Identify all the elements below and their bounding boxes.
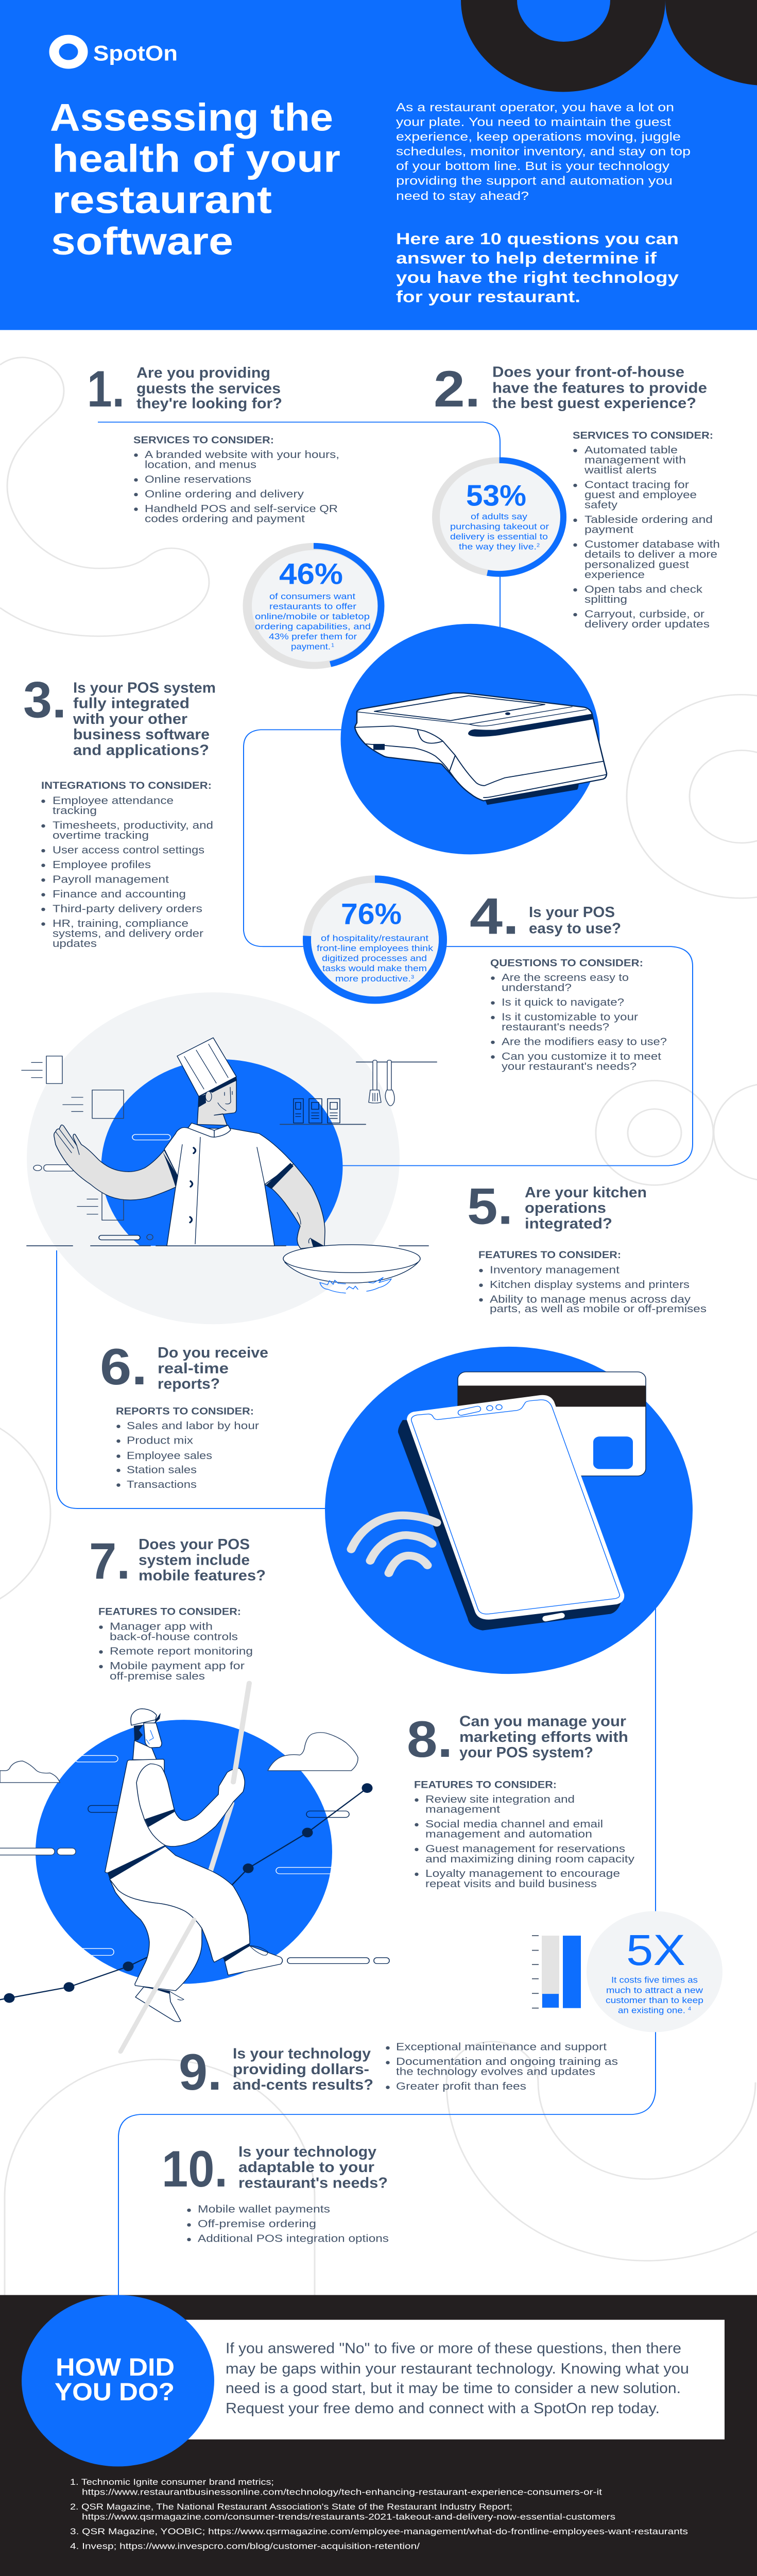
intro paragraph: need to stay ahead? (396, 190, 529, 203)
list: integrations to consider (41, 780, 213, 950)
list: services to consider: Online reservations (145, 473, 251, 485)
list: features to consider: Remote report monitoring (110, 1646, 253, 1657)
title: Assessing the (50, 96, 333, 139)
list: questions to consider: understand? (502, 982, 572, 993)
footnotes: https://www.restaurantbusinessonline.com/technology/tech-enhancing-restaurant-experience-consumers-or-it (82, 2487, 602, 2497)
heading 6: real-time (158, 1361, 229, 1377)
number 9: 9. (179, 2044, 222, 2101)
list: reports to consider: Employee sales (127, 1450, 212, 1462)
list: reports to consider: Sales and labor by hour (127, 1420, 259, 1432)
conclusion box: Request your free demo and connect with a SpotOn rep today. (226, 2401, 660, 2417)
intro callout: Here are 10 questions you can (396, 230, 679, 248)
list: services to consider: SERVICES TO CONSIDER: (133, 434, 274, 446)
list: services to consider: Tableside ordering and (584, 514, 713, 526)
conclusion box: need is a good start, but it may be time to consider a new solution. (226, 2381, 681, 2397)
list: features to consider: Inventory management (490, 1264, 620, 1276)
heading 4 (529, 905, 621, 937)
heading 6 (158, 1345, 268, 1392)
heading 7: system include (139, 1552, 250, 1568)
stat 46%: restaurants to offer (269, 601, 356, 611)
stat 46%: payment. (291, 642, 331, 651)
stat 76% (303, 875, 447, 1004)
clouds and pills (0, 1733, 389, 1963)
list: services to consider: personalized guest (584, 558, 689, 570)
heading 9: providing dollars- (233, 2061, 369, 2077)
stat 46%: of consumers want (269, 591, 355, 601)
heading 10: Is your technology (238, 2144, 376, 2160)
question 3 (23, 671, 216, 950)
heading 10: adaptable to your (238, 2160, 374, 2176)
list: reports to consider: REPORTS TO CONSIDER: (116, 1406, 254, 1417)
heading 8: Can you manage your (459, 1714, 626, 1730)
list: features to consider (478, 1249, 707, 1315)
intro callout: you have the right technology (396, 269, 679, 286)
illustration: chef (22, 1038, 437, 1293)
stat 53% (432, 457, 566, 577)
footnotes: 4. Invesp; https://www.invespcro.com/blog/customer-acquisition-retention/ (70, 2541, 420, 2551)
heading 3 (73, 680, 216, 758)
list: features to consider: Guest management for reservations (425, 1843, 625, 1855)
list: features to consider: back-of-house controls (110, 1631, 238, 1642)
list: features to consider: repeat visits and build business (425, 1878, 597, 1890)
list: integrations to consider: tracking (53, 805, 97, 817)
list: features to consider: parts, as well as mobile or off-premises (490, 1303, 707, 1315)
heading 7: mobile features? (139, 1568, 266, 1584)
list: questions to consider: your restaurant's needs? (502, 1061, 636, 1072)
list: services to consider: details to deliver a more (584, 549, 717, 560)
heading 9: and-cents results? (233, 2077, 373, 2093)
list: results: Greater profit than fees (396, 2080, 526, 2092)
number 8: 8. (407, 1711, 453, 1768)
list: integrations to consider: overtime tracking (53, 829, 149, 841)
heading 8 (459, 1714, 628, 1761)
list: features to consider: Social media channel and email (425, 1818, 603, 1830)
number 6: 6. (100, 1338, 147, 1395)
stat 76%: tasks would make them (322, 963, 427, 973)
number 1: 1. (87, 361, 125, 418)
stat 53%: the way they live. (459, 542, 537, 551)
stat 5X (587, 1911, 722, 2032)
heading 10: restaurant's needs? (238, 2175, 388, 2191)
number 7: 7. (89, 1533, 130, 1590)
mixing bowl (285, 1262, 418, 1283)
heading 1: Are you providing (136, 365, 270, 381)
stat 76%: of hospitality/restaurant (321, 933, 428, 943)
intro paragraph: schedules, monitor inventory, and stay on top (396, 145, 691, 158)
conclusion box (154, 2320, 725, 2439)
stat 53%: 2 (537, 543, 540, 548)
list: features to consider: off-premise sales (110, 1670, 205, 1682)
list: integrations to consider: Payroll management (53, 874, 169, 885)
list: services to consider: Contact tracing for (584, 479, 689, 490)
heading 2: have the features to provide (492, 380, 707, 396)
list: features to consider: Manager app with (110, 1621, 213, 1632)
list: services to consider: codes ordering and payment (145, 513, 305, 524)
intro paragraph: experience, keep operations moving, juggle (396, 130, 681, 144)
list: services to consider (573, 430, 720, 630)
heading 9 (233, 2046, 373, 2093)
pole in hand (233, 1683, 249, 1782)
how did you do badge (22, 2295, 214, 2466)
heading 4: easy to use? (529, 921, 621, 937)
illustration: climber on growth chart (0, 1683, 389, 2052)
heading 2 (492, 364, 707, 411)
stat 53%: of adults say (471, 512, 527, 521)
list: integrations to consider: Timesheets, productivity, and (53, 820, 213, 831)
wifi signal (351, 1515, 437, 1573)
bar chart: acquisition vs retention cost (532, 1935, 581, 2009)
intro paragraph: providing the support and automation you (396, 175, 673, 188)
footer panel (0, 2295, 757, 2576)
list: features to consider: Mobile payment app for (110, 1660, 245, 1672)
heading 4: Is your POS (529, 905, 615, 921)
list: features to consider: Ability to manage menus across day (490, 1294, 691, 1305)
chef left arm (54, 1125, 178, 1200)
stat 5X: 5X (626, 1926, 685, 1975)
stat 5X: customer than to keep (606, 1995, 703, 2005)
question 10 (162, 2140, 389, 2244)
how did you do badge: HOW DID (56, 2353, 175, 2381)
pole lower (121, 1920, 194, 2052)
heading 10 (238, 2144, 388, 2191)
footnotes: 2. QSR Magazine, The National Restaurant Association's State of the Restaurant Industry Report; (70, 2502, 512, 2512)
heading 3: and applications? (73, 742, 209, 758)
chef blue circle (101, 1059, 343, 1246)
stat 76%: digitized processes and (322, 954, 427, 963)
footnotes (70, 2477, 688, 2551)
list: reports to consider: Product mix (127, 1435, 193, 1446)
heading 3: business software (73, 727, 210, 743)
list: integrations to consider: systems, and delivery order (53, 928, 203, 939)
list: integrations to consider: Employee attendance (53, 795, 174, 806)
heading 9: Is your technology (233, 2046, 371, 2062)
list: questions to consider: Can you customize it to meet (502, 1050, 661, 1062)
list: results: the technology evolves and updates (396, 2066, 595, 2077)
payment card (458, 1372, 646, 1476)
footnotes: 3. QSR Magazine, YOOBIC; https://www.qsrmagazine.com/employee-management/what-do-frontline-employees-want-restaurants (70, 2527, 688, 2536)
heading 6: reports? (158, 1376, 220, 1392)
list: questions to consider (490, 958, 667, 1072)
list: features to consider: FEATURES TO CONSIDER: (414, 1780, 557, 1790)
stat 5X: much to attract a new (606, 1985, 703, 1995)
heading 8: your POS system? (459, 1745, 593, 1761)
decorative black loops (461, 0, 757, 92)
number 2: 2. (434, 361, 480, 418)
stat 53%: 53% (466, 479, 526, 512)
list: features to consider (414, 1780, 634, 1890)
decorative background outlines (0, 358, 757, 2295)
list: features to consider: Review site integration and (425, 1793, 575, 1805)
conclusion box: may be gaps within your restaurant technology. Knowing what you (226, 2361, 689, 2377)
heading 2: Does your front-of-house (492, 364, 684, 380)
list: features to consider: management (425, 1804, 500, 1815)
list: integrations to consider: INTEGRATIONS TO CONSIDER: (41, 780, 212, 791)
heading 7: Does your POS (139, 1537, 250, 1553)
question 1 (87, 361, 339, 524)
how did you do badge: YOU DO? (55, 2378, 175, 2406)
list: questions to consider: Is it quick to navigate? (502, 996, 624, 1008)
list: services to consider: Open tabs and check (584, 583, 702, 595)
footnotes: 1. Technomic Ignite consumer brand metrics; (70, 2477, 274, 2487)
heading 5: operations (525, 1200, 606, 1216)
heading 5 (525, 1184, 647, 1232)
growth chart line (0, 1783, 373, 2003)
chef coat (164, 1128, 294, 1246)
stat 53%: delivery is essential to (450, 532, 548, 541)
list: questions to consider: Are the modifiers easy to use? (502, 1036, 667, 1047)
list: services to consider: Handheld POS and self-service QR (145, 503, 338, 514)
number 5: 5. (467, 1178, 513, 1235)
list: services to consider: guest and employee (584, 489, 697, 501)
heading 2: the best guest experience? (492, 395, 696, 411)
list: integrations to consider: Finance and accounting (53, 888, 186, 900)
list: services to consider: splitting (584, 594, 627, 605)
heading 3: fully integrated (73, 696, 190, 711)
list: services to consider: management with (584, 454, 686, 466)
intro callout: answer to help determine if (396, 249, 657, 267)
list: integrations to consider: Employee profiles (53, 859, 151, 871)
logo (54, 39, 178, 65)
heading 1: they're looking for? (136, 396, 282, 412)
header banner (0, 0, 757, 330)
list: questions to consider: restaurant's needs? (502, 1021, 609, 1033)
list: features to consider: management and automation (425, 1828, 592, 1840)
number 10: 10. (162, 2140, 228, 2197)
list: questions to consider: QUESTIONS TO CONSIDER: (490, 958, 643, 969)
list: results: Exceptional maintenance and support (396, 2041, 607, 2053)
list: features to consider: FEATURES TO CONSIDER: (478, 1249, 621, 1261)
question 5 (467, 1178, 707, 1315)
list: adaptability: Off-premise ordering (198, 2218, 316, 2230)
intro paragraph: your plate. You need to maintain the guest (396, 116, 671, 129)
list: services to consider (133, 434, 339, 524)
chef head (197, 1080, 236, 1125)
logo: SpotOn (93, 42, 178, 65)
list: services to consider: Carryout, curbside, or (584, 608, 704, 620)
climber body (105, 1709, 282, 2022)
list: services to consider: delivery order updates (584, 618, 710, 630)
phone (398, 1395, 624, 1631)
list: reports to consider: Transactions (127, 1479, 197, 1490)
title: software (51, 219, 233, 263)
list: questions to consider: Is it customizable to your (502, 1011, 638, 1023)
stat 46%: online/mobile or tabletop (255, 612, 370, 621)
title (50, 96, 340, 263)
heading 3: Is your POS system (73, 680, 216, 696)
kitchen props (22, 1056, 437, 1246)
question 6 (100, 1338, 268, 1490)
chef hat (177, 1038, 236, 1096)
list: reports to consider (116, 1406, 259, 1490)
question 2 (434, 361, 720, 630)
list: results: Documentation and ongoing training as (396, 2056, 618, 2067)
heading 3: with your other (73, 711, 187, 727)
number 4: 4. (470, 888, 519, 945)
heading 7 (139, 1537, 266, 1584)
title: restaurant (52, 178, 272, 222)
heading 1: guests the services (136, 381, 281, 397)
list: services to consider: safety (584, 499, 617, 511)
stat 76%: more productive. (335, 974, 411, 984)
stat 76%: front-line employees think (317, 943, 434, 953)
list: features to consider: Loyalty management to encourage (425, 1868, 620, 1879)
stat 46%: 43% prefer them for (269, 632, 357, 641)
blue connector path (57, 422, 693, 2296)
chef right arm (265, 1164, 325, 1248)
heading 8: marketing efforts with (459, 1729, 628, 1745)
intro paragraph: As a restaurant operator, you have a lot on (396, 101, 674, 114)
list: services to consider: experience (584, 569, 645, 581)
stat 76%: 3 (411, 975, 414, 980)
list: services to consider: location, and menus (145, 459, 256, 470)
list: adaptability (187, 2204, 389, 2244)
number 3: 3. (23, 671, 66, 728)
list: adaptability: Mobile wallet payments (198, 2204, 330, 2215)
stat 46% (243, 543, 384, 669)
stat 46%: 46% (279, 557, 343, 591)
list: services to consider: Customer database with (584, 538, 720, 550)
stat 5X: It costs five times as (611, 1975, 698, 1985)
list: features to consider (98, 1606, 253, 1682)
list: integrations to consider: Third-party delivery orders (53, 903, 202, 914)
illustration: phone and card (325, 1347, 693, 1674)
stat 5X: 4 (688, 2007, 691, 2012)
list: adaptability: Additional POS integration options (198, 2233, 389, 2244)
stat 76%: 76% (341, 897, 402, 931)
heading 6: Do you receive (158, 1345, 268, 1361)
stat 46%: ordering capabilities, and (255, 621, 371, 631)
chef background circle (27, 992, 400, 1324)
intro callout: for your restaurant. (396, 288, 580, 306)
list: integrations to consider: updates (53, 938, 97, 950)
list: integrations to consider: HR, training, compliance (53, 918, 188, 929)
illustration: POS terminal (341, 624, 607, 854)
list: features to consider: and maximizing dining room capacity (425, 1853, 634, 1865)
list: services to consider: A branded website with your hours, (145, 449, 339, 460)
heading 5: integrated? (525, 1216, 612, 1232)
list: features to consider: FEATURES TO CONSIDER: (98, 1606, 241, 1617)
stat 5X: an existing one. (618, 2005, 685, 2015)
list: services to consider: SERVICES TO CONSIDER: (573, 430, 713, 441)
question 4 (470, 888, 667, 1072)
list: features to consider: Kitchen display systems and printers (490, 1279, 690, 1291)
stat 46%: 1 (331, 643, 334, 648)
question 9 (179, 2041, 618, 2101)
stat 53%: purchasing takeout or (450, 522, 549, 531)
list: services to consider: waitlist alerts (584, 464, 657, 476)
question 7 (89, 1533, 266, 1682)
list: results (386, 2041, 618, 2092)
intro paragraph: of your bottom line. But is your technology (396, 160, 670, 173)
heading 5: Are your kitchen (525, 1184, 647, 1200)
list: integrations to consider: User access control settings (53, 844, 204, 856)
pole behind figure (211, 1803, 232, 1871)
question 8 (407, 1711, 634, 1890)
heading 1 (136, 365, 282, 412)
title: health of your (52, 137, 340, 180)
list: services to consider: payment (584, 524, 633, 535)
list: services to consider: Automated table (584, 444, 678, 456)
footnotes: https://www.qsrmagazine.com/consumer-trends/restaurants-2021-takeout-and-delivery-now-essential-customers (82, 2512, 615, 2521)
list: questions to consider: Are the screens easy to (502, 972, 629, 984)
intro callout (396, 230, 679, 306)
list: services to consider: Online ordering and delivery (145, 488, 304, 500)
intro paragraph (396, 101, 691, 203)
conclusion box: If you answered "No" to five or more of these questions, then there (226, 2341, 681, 2357)
list: reports to consider: Station sales (127, 1464, 197, 1476)
